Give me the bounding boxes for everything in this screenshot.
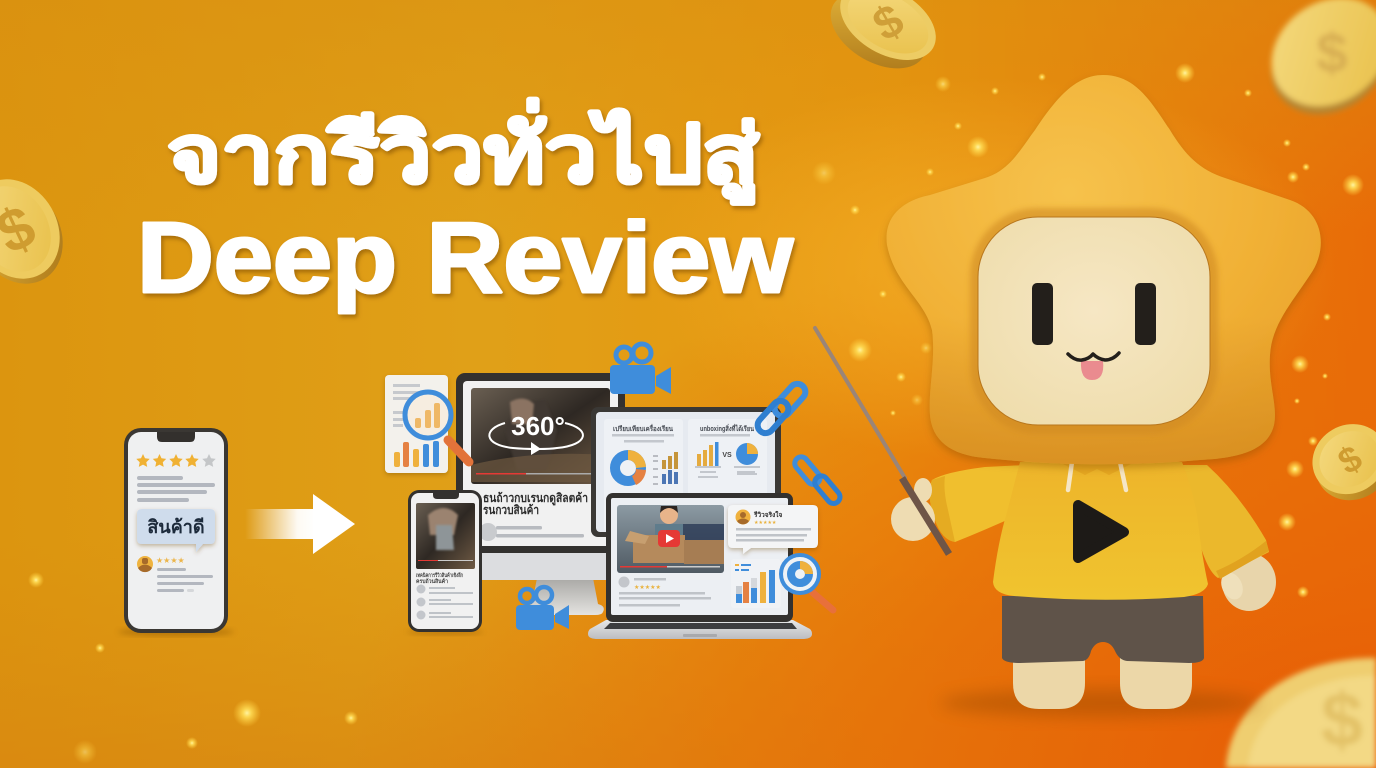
monitor (456, 373, 625, 615)
magnifier with pie (781, 555, 833, 610)
laptop (588, 493, 833, 639)
face (970, 208, 1218, 434)
pointer stick (815, 328, 905, 478)
star rating (136, 454, 216, 467)
phone video (416, 503, 475, 569)
arrow (245, 494, 355, 554)
mascot (887, 75, 1321, 717)
document with magnifier (385, 375, 469, 473)
mouth (1068, 353, 1119, 360)
chain: lower (792, 454, 843, 506)
chain: upper (754, 381, 809, 436)
coin: top right blurred (1251, 0, 1376, 137)
pointer grip (902, 478, 949, 554)
360 label: 360° (511, 411, 565, 441)
laptop: ★★★★★ (634, 584, 661, 591)
coin: top right blurred: $ (1316, 21, 1348, 84)
legs (1013, 655, 1192, 709)
shorts (1002, 596, 1204, 663)
hoodie (993, 458, 1208, 600)
bar chart panel (731, 559, 781, 608)
panel: comparison chart left: เปรียบเทียบเครื่องเรียน (613, 423, 673, 433)
tongue (1081, 361, 1103, 380)
panel: comparison chart right (688, 419, 767, 531)
eyes (1032, 283, 1053, 345)
comment bubble: ★★★★★ (754, 520, 777, 526)
icon: camera bottom (516, 587, 569, 630)
hand: viewer right (1217, 553, 1276, 611)
speech bubble (137, 509, 215, 552)
hoodie collar and strings (1052, 456, 1144, 490)
coin: bottom right blurred (1226, 658, 1376, 768)
title line 1: จากรีวิวทั่วไปสู่ (167, 98, 759, 205)
panel: comparison chart right: unboxingสิ่งที่ได้เรียน (700, 423, 754, 433)
panel: comparison chart right: VS (722, 452, 732, 459)
arm: viewer right (1178, 465, 1269, 579)
icon: camera top (610, 344, 671, 394)
monitor text: ธนถ้าวกบเรนกดูสิลตค้า (483, 491, 588, 506)
star head (887, 75, 1321, 464)
coin: right (1300, 411, 1376, 514)
phone: simple review: ★★★★ (156, 556, 185, 565)
reviewer (137, 556, 153, 572)
coin: bottom right blurred: $ (1321, 678, 1363, 763)
coin: left (0, 163, 80, 300)
coin: top (818, 0, 949, 86)
review lines (618, 576, 630, 588)
panel: comparison chart left (604, 419, 683, 531)
title line 2: Deep Review (137, 202, 793, 314)
title (137, 98, 793, 314)
phone: deep review (407, 490, 483, 635)
phone: deep review: เทคนิคการรีวิวสินค้าเชิงลึก (416, 571, 463, 579)
monitor: รนกวบสินค้า (483, 503, 539, 517)
speech bubble: สินค้าดี (147, 517, 205, 537)
comment bubble: รีวิวจริงใจ (753, 510, 782, 519)
coin: right: $ (1331, 437, 1369, 482)
devices group (385, 344, 843, 639)
chain icons (754, 381, 843, 506)
video 360 (471, 388, 610, 484)
icon: play (1078, 505, 1124, 558)
phone: simple review (118, 428, 234, 636)
arm: viewer left (930, 465, 1025, 542)
phone: deep review: ครบถ้วนสินค้า (416, 577, 448, 585)
hand: viewer left (891, 478, 935, 541)
tablet dashboard (591, 407, 781, 537)
video: unboxing (617, 505, 724, 573)
comment bubble (728, 505, 818, 554)
